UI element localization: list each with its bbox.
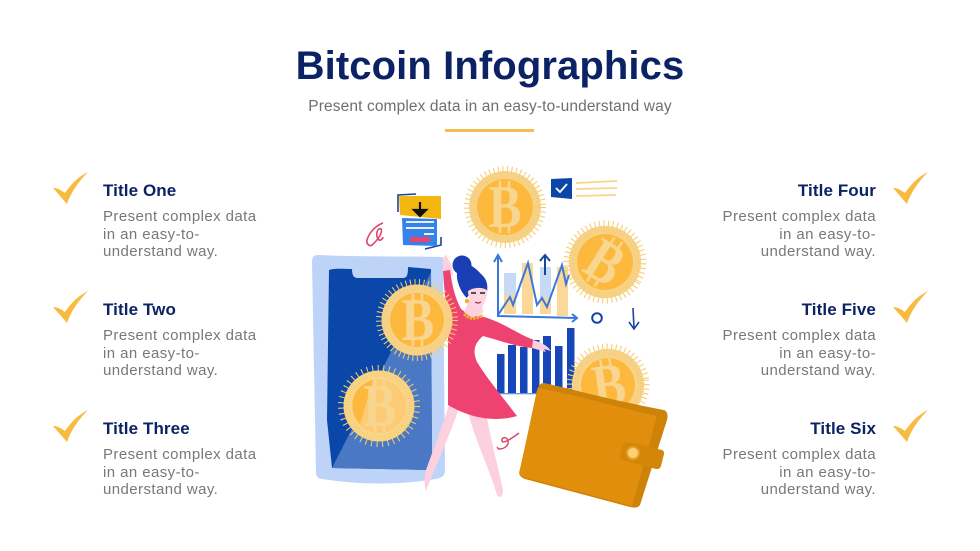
item: Title Three: Present complex data	[103, 446, 256, 463]
coin: top	[468, 170, 542, 244]
earring	[465, 299, 469, 303]
item: Title Two: Present complex data	[103, 327, 256, 344]
item: Title Three: understand way.	[103, 481, 218, 498]
icon: small ring	[592, 313, 602, 323]
line chart	[494, 255, 577, 322]
item: Title Five: understand way.	[761, 362, 876, 379]
left leg	[424, 405, 459, 491]
swirl: lower	[497, 433, 519, 449]
item: Title Four: understand way.	[761, 243, 876, 260]
item: Title Three	[103, 419, 256, 498]
bar chart	[497, 328, 575, 394]
item: Title Five: Title Five	[802, 300, 876, 319]
icon: document download	[398, 194, 441, 249]
item: Title One: in an easy-to-	[103, 226, 200, 242]
icon: checkmark five	[893, 291, 928, 323]
item: Title Two: understand way.	[103, 362, 218, 379]
item: Title Five	[723, 300, 876, 379]
coin: on phone bottom: B	[363, 372, 396, 439]
item: Title Five: Present complex data	[723, 327, 876, 344]
icon: checkmark three	[53, 410, 88, 442]
item: Title Four: Title Four	[798, 181, 876, 200]
item: Title One: understand way.	[103, 243, 218, 260]
coin: in wallet: B	[588, 349, 630, 420]
arrow: up	[540, 255, 550, 275]
face	[468, 288, 487, 308]
item: Title Six: understand way.	[761, 481, 876, 498]
item: Title Two	[103, 300, 256, 379]
raised hand	[443, 255, 453, 279]
wallet	[519, 383, 668, 508]
icon: checkmark four	[893, 172, 928, 204]
necklace	[464, 314, 483, 318]
dress	[443, 270, 534, 419]
item: Title One	[103, 181, 256, 260]
item: Title Four	[723, 181, 876, 260]
coin: on phone top	[380, 283, 454, 357]
item: Title Five: in an easy-to-	[779, 344, 876, 362]
coin: on phone top: B	[401, 286, 434, 353]
arrow: down	[629, 308, 639, 329]
coin: right	[553, 210, 657, 314]
hand	[532, 340, 551, 352]
item: Title Six: in an easy-to-	[779, 464, 876, 480]
item: Title Six: Title Six	[810, 419, 876, 438]
hair	[452, 256, 472, 274]
item: Title Three: in an easy-to-	[103, 464, 200, 480]
clasp	[620, 442, 664, 469]
item: Title Two: in an easy-to-	[103, 344, 200, 362]
woman	[424, 255, 551, 497]
right leg	[468, 412, 503, 497]
accent underline	[445, 129, 534, 132]
coin: right: B	[574, 225, 637, 299]
coin: on phone bottom	[342, 369, 416, 443]
subtitle: Present complex data in an easy-to-understand way	[308, 98, 672, 115]
icon: checkmark two	[53, 291, 88, 323]
icon: checkmark one	[53, 172, 88, 204]
title: Bitcoin Infographics	[296, 44, 684, 88]
phone	[312, 255, 445, 484]
item: Title Six	[723, 419, 876, 498]
coin: top: B	[489, 173, 521, 240]
item: Title Two: Title Two	[103, 300, 176, 319]
icon: checkmark six	[893, 410, 928, 442]
item: Title Six: Present complex data	[723, 446, 876, 463]
item: Title One: Title One	[103, 181, 176, 200]
item: Title Four: in an easy-to-	[779, 226, 876, 242]
squiggle: upper	[367, 223, 383, 246]
icon: checklist	[551, 178, 617, 199]
item: Title Four: Present complex data	[723, 208, 876, 225]
coin: in wallet	[566, 343, 650, 427]
item: Title Three: Title Three	[103, 419, 190, 438]
item: Title One: Present complex data	[103, 208, 256, 225]
neck	[464, 300, 483, 318]
